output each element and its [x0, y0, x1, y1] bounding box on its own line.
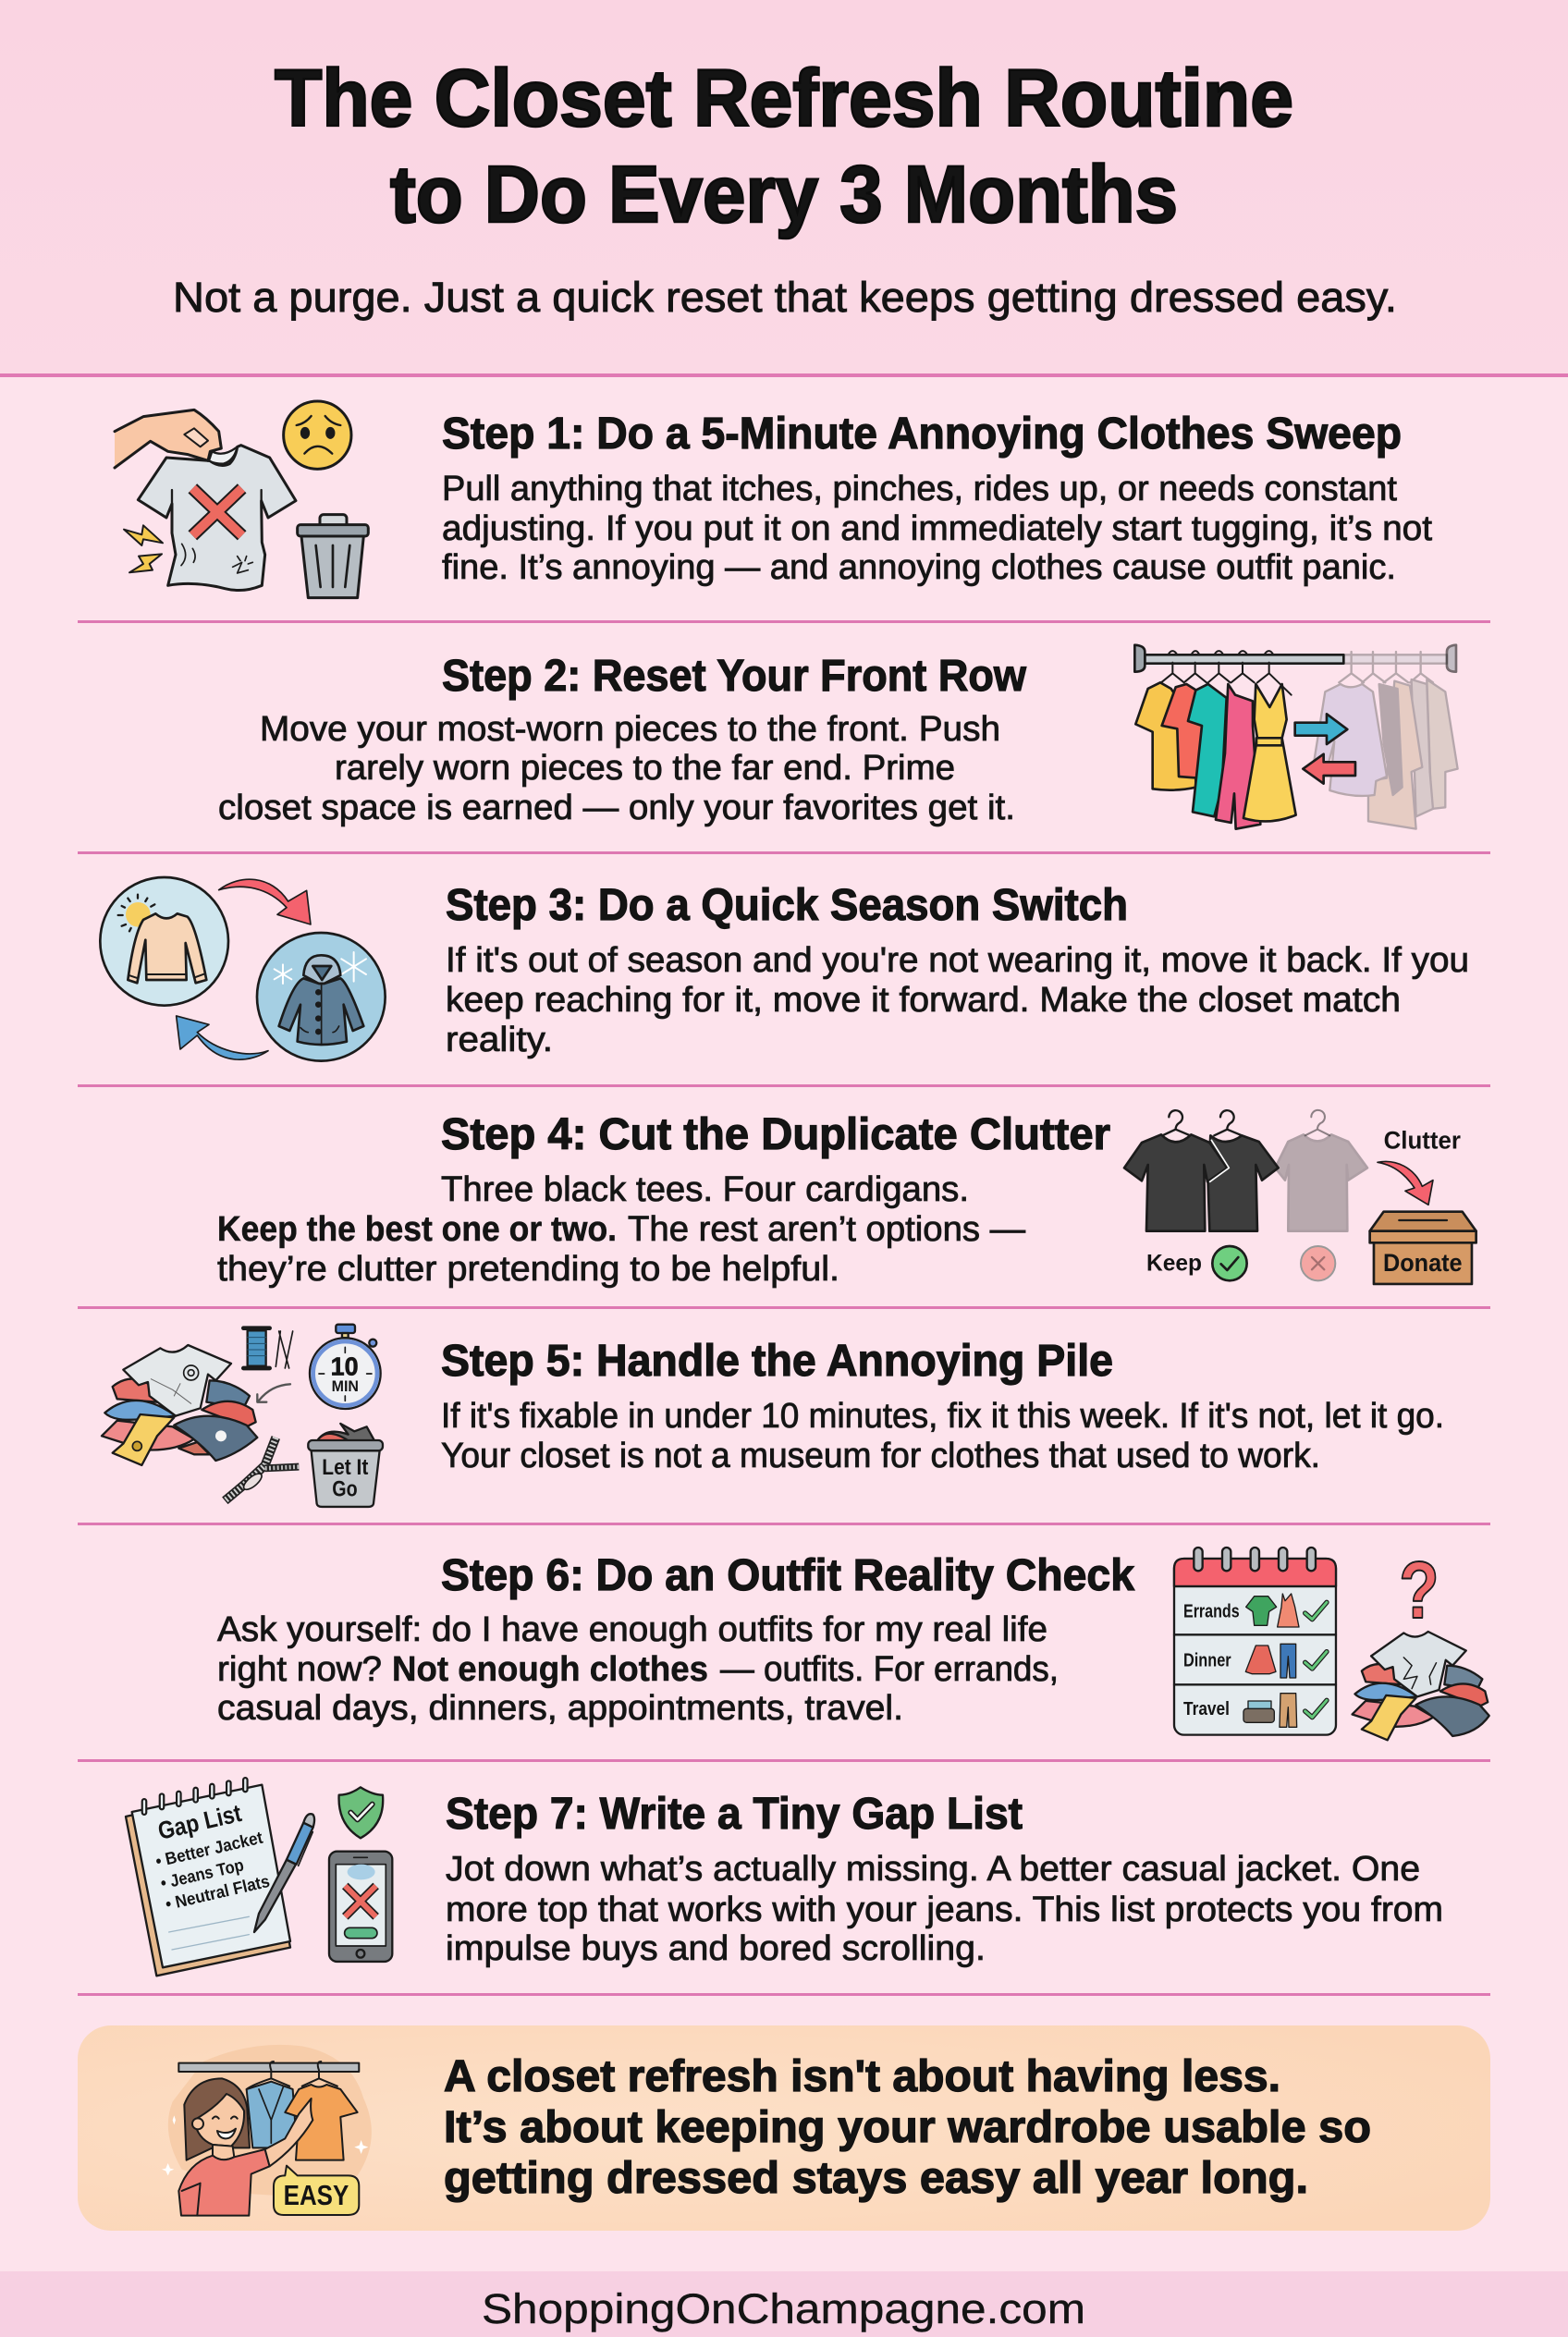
panel: step 1 [115, 401, 1432, 598]
step 4 body: they’re clutter pretending to be helpful. [217, 1250, 839, 1289]
step 4 body: Keep the best one or two. [217, 1210, 617, 1249]
step 3 body: If it's out of season and you're not wearing it, move it back. If you [446, 941, 1469, 980]
panel: step 7 [126, 1780, 1443, 1976]
callout text: A closet refresh isn't about having less. [444, 2052, 1280, 2101]
step 7 body [446, 1850, 1443, 1968]
icon: outfit calendar and question pile: Errands [1183, 1600, 1240, 1621]
panel: step 6 [217, 1545, 1489, 1740]
panel: step 4 [217, 1110, 1476, 1289]
step 2 body: Move your most-worn pieces to the front. Push [260, 710, 1000, 749]
title: to Do Every 3 Months [390, 150, 1178, 239]
step 3 body: keep reaching for it, move it forward. Make the closet match [446, 981, 1401, 1020]
step 5 body [441, 1397, 1444, 1475]
icon: gap list notepad, pen, shield, phone: • Neutral Flats [164, 1871, 272, 1914]
title: The Closet Refresh Routine [275, 54, 1293, 143]
icon: gap list notepad, pen, shield, phone: Gap List [155, 1799, 244, 1845]
icon: outfit calendar and question pile [1174, 1545, 1489, 1740]
icon: pile, sewing kit, timer, let it go bin: Go [332, 1476, 358, 1501]
step 4 heading: Step 4: Cut the Duplicate Clutter [441, 1110, 1110, 1159]
step 2 body [218, 710, 1015, 827]
step 7 body: Jot down what’s actually missing. A better casual jacket. One [446, 1850, 1420, 1889]
icon: pile, sewing kit, timer, let it go bin: MIN [332, 1377, 359, 1395]
icon: black tees, keep and donate box: Clutter [1384, 1127, 1461, 1155]
icon: annoying tee, sad face, trash [115, 401, 368, 598]
step 6 body [217, 1610, 1059, 1728]
step 2 heading: Step 2: Reset Your Front Row [442, 652, 1027, 701]
step 4 body: Three black tees. Four cardigans. [441, 1170, 969, 1209]
footer band [0, 2271, 1568, 2337]
step 1 body: Pull anything that itches, pinches, rides up, or needs constant [442, 470, 1397, 508]
icon: pile, sewing kit, timer, let it go bin: Let It [322, 1455, 368, 1480]
icon: woman choosing clothes, easy badge: EASY [284, 2180, 349, 2211]
subtitle: Not a purge. Just a quick reset that keeps getting dressed easy. [173, 274, 1397, 321]
step 5 heading: Step 5: Handle the Annoying Pile [441, 1337, 1113, 1386]
icon: outfit calendar and question pile: Dinner [1183, 1650, 1231, 1671]
header panel [0, 0, 1568, 377]
icon: black tees, keep and donate box [1124, 1110, 1476, 1284]
step 5 body: If it's fixable in under 10 minutes, fix it this week. If it's not, let it go. [441, 1397, 1444, 1436]
callout text: getting dressed stays easy all year long. [444, 2154, 1308, 2203]
icon: outfit calendar and question pile: ? [1399, 1545, 1439, 1635]
step 2 body: closet space is earned — only your favorites get it. [218, 789, 1015, 827]
step 6 body: right now? [217, 1650, 382, 1689]
icon: black tees, keep and donate box: Donate [1383, 1249, 1463, 1277]
icon: pile, sewing kit, timer, let it go bin [102, 1325, 383, 1507]
panel: step 5 [102, 1325, 1444, 1507]
title [275, 54, 1293, 239]
step 3 heading: Step 3: Do a Quick Season Switch [446, 881, 1128, 930]
step 7 heading: Step 7: Write a Tiny Gap List [446, 1790, 1023, 1839]
step 1 heading: Step 1: Do a 5-Minute Annoying Clothes Sweep [442, 410, 1402, 459]
step 2 body: rarely worn pieces to the far end. Prime [335, 749, 955, 788]
callout text [444, 2052, 1371, 2203]
step 6 body: casual days, dinners, appointments, travel. [217, 1689, 903, 1728]
step 1 body: adjusting. If you put it on and immediately start tugging, it’s not [442, 509, 1432, 548]
panel: step 3 [100, 877, 1469, 1061]
icon: outfit calendar and question pile: Travel [1183, 1698, 1230, 1719]
step 1 body: fine. It’s annoying — and annoying clothes cause outfit panic. [442, 548, 1396, 587]
icon: gap list notepad, pen, shield, phone: • Jeans Top [159, 1854, 246, 1892]
step 4 body: The rest aren’t options — [628, 1210, 1025, 1249]
step 6 heading: Step 6: Do an Outfit Reality Check [441, 1551, 1134, 1600]
callout panel [78, 2025, 1490, 2231]
icon: clothing rack with arrows [1134, 645, 1458, 829]
icon: season switch circles [100, 877, 386, 1061]
step 4 body [217, 1170, 1025, 1289]
step 6 body: — outfits. For errands, [720, 1650, 1059, 1689]
step 6 body: Not enough clothes [392, 1650, 708, 1689]
website: ShoppingOnChampagne.com [482, 2285, 1085, 2332]
step 7 body: more top that works with your jeans. This list protects you from [446, 1890, 1443, 1929]
step 7 body: impulse buys and bored scrolling. [446, 1929, 986, 1968]
panel: step 2 [218, 645, 1458, 829]
icon: pile, sewing kit, timer, let it go bin: 10 [331, 1352, 359, 1380]
callout text: It’s about keeping your wardrobe usable so [444, 2103, 1371, 2152]
step 3 body: reality. [446, 1021, 553, 1059]
step 1 body [442, 470, 1432, 587]
step 3 body [446, 941, 1469, 1059]
icon: gap list notepad, pen, shield, phone: • Better Jacket [153, 1828, 264, 1871]
icon: black tees, keep and donate box: Keep [1146, 1251, 1202, 1276]
step 5 body: Your closet is not a museum for clothes that used to work. [441, 1437, 1320, 1475]
step 6 body: Ask yourself: do I have enough outfits for my real life [217, 1610, 1047, 1649]
icon: woman choosing clothes, easy badge [162, 2045, 372, 2216]
icon: gap list notepad, pen, shield, phone [126, 1780, 392, 1976]
